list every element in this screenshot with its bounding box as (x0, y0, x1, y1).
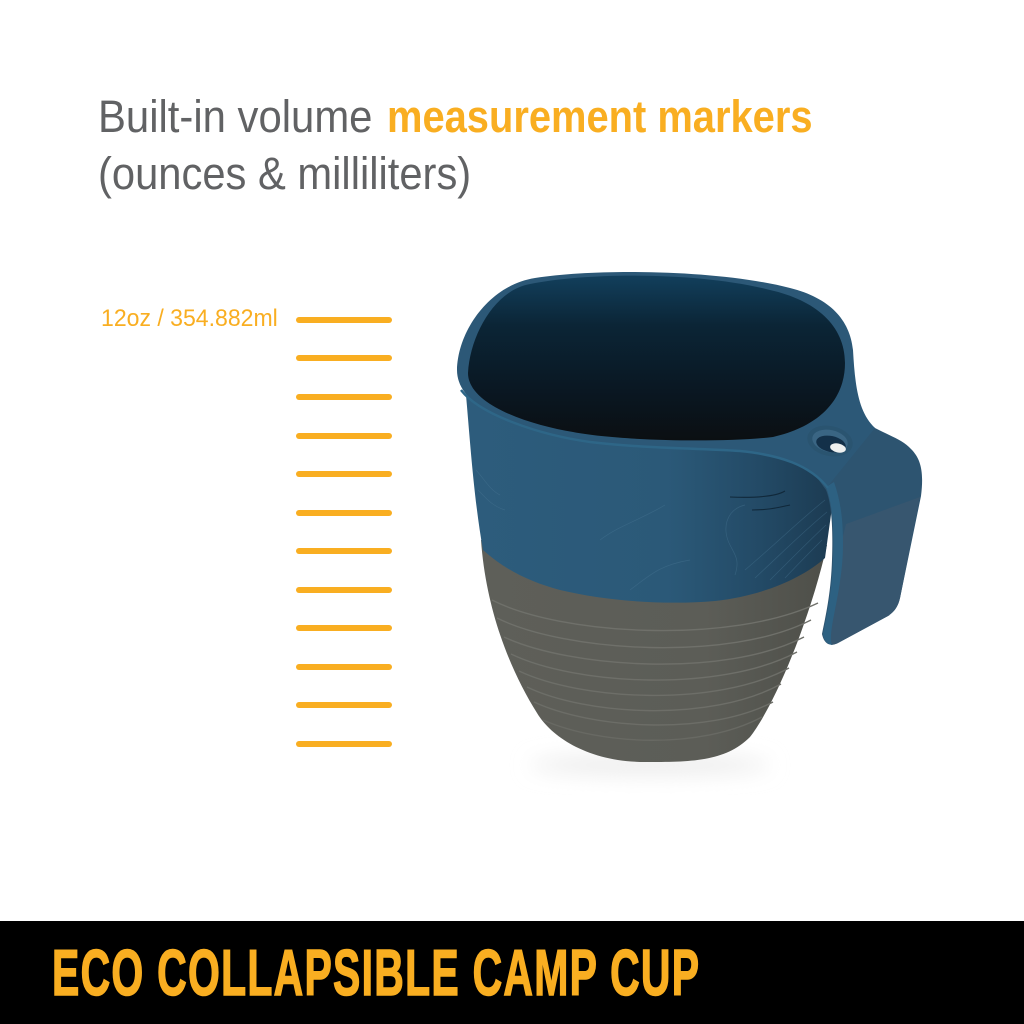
topographic contour lines (476, 470, 827, 590)
handle (790, 390, 922, 645)
blue upper body (466, 395, 833, 603)
ridges (492, 600, 818, 740)
handle hole (804, 422, 856, 460)
handle face (825, 497, 920, 645)
heading: measurement markers (387, 91, 813, 142)
heading: (ounces & milliliters) (98, 148, 471, 199)
dark contour marks (730, 491, 790, 510)
heading (98, 91, 813, 199)
grey lower body (481, 540, 827, 762)
footer banner (0, 921, 1024, 1024)
heading: Built-in volume (98, 91, 372, 142)
measurement tick marks (296, 317, 392, 747)
footer title: ECO COLLAPSIBLE CAMP CUP (52, 936, 700, 1009)
rim highlight edge (461, 390, 828, 488)
rim (457, 272, 875, 486)
handle lip (823, 482, 843, 645)
measurement label: 12oz / 354.882ml (101, 305, 278, 332)
cup interior (468, 276, 845, 440)
cup shadow (530, 755, 770, 775)
